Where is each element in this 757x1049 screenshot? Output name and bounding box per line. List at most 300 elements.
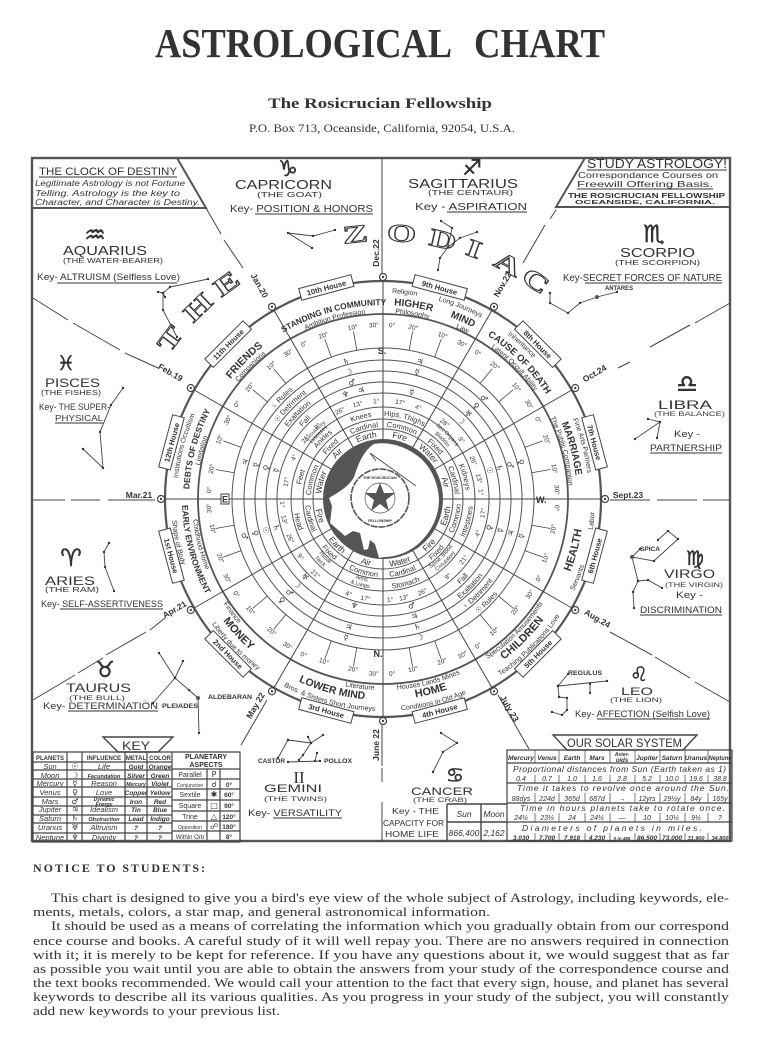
planetary aspects: ✱ <box>211 790 218 799</box>
planet symbols: ♀ <box>471 401 481 411</box>
sign: Pisces: PHYSICAL <box>55 413 103 423</box>
body parts ring: Circulatory <box>303 419 328 443</box>
row: orbital periods: 365d <box>564 796 581 803</box>
row: proportional distances <box>513 764 727 783</box>
sun marks on spokes <box>158 274 608 724</box>
planetary aspects: Opposition <box>178 825 202 831</box>
row: rotation: Time in hours planets take to rotate once. <box>520 803 725 813</box>
key planet rows: Iron <box>130 799 142 806</box>
house keywords: 4th house: HOME <box>414 682 447 698</box>
word: THE ZODIAC: O <box>386 219 417 248</box>
key planet rows: ♄ <box>71 814 79 823</box>
planetary aspects: ☌ <box>211 780 217 789</box>
word: THE ZODIAC: D <box>427 223 459 256</box>
panel: the clock of destiny <box>32 158 206 208</box>
planetary dignities labels: ☉ Detriment <box>271 386 310 425</box>
house keywords: 3rd house: Bros. & Sisters Short Journeys <box>284 682 375 712</box>
row: orbital periods: 29½y <box>662 795 681 803</box>
key planet rows: Venus <box>40 788 61 797</box>
word: THE ZODIAC: T <box>152 321 189 357</box>
sign: Scorpio: SCORPIO <box>620 245 695 260</box>
element ring: Air <box>439 476 452 489</box>
house keywords: 6th house: HEALTH <box>564 529 582 572</box>
sign: Taurus: ALDEBARAN <box>208 695 252 701</box>
degree tick labels: 20° <box>215 552 226 565</box>
planetary aspects: 8° <box>226 833 233 841</box>
degree tick labels: 10° <box>318 656 330 667</box>
row: diameters: Diameters of planets in miles. <box>522 823 702 833</box>
key planet rows: ? <box>134 835 138 842</box>
ingress dates: July 23 <box>498 694 521 724</box>
planet symbols: ♄ <box>341 356 351 367</box>
house keywords: 1st house: EARLY ENVIRONMENT <box>182 505 211 592</box>
key planet rows: ♅ <box>71 823 79 832</box>
spoke degree labels: 30° <box>222 413 234 426</box>
sign: Cancer: CAPACITY FOR <box>383 819 444 828</box>
key header row: PLANETS <box>36 756 64 762</box>
row: rotation: 9½ <box>691 814 701 822</box>
degrees ring: 9° <box>443 571 453 581</box>
key planet rows: Yellow <box>150 790 171 797</box>
degree tick labels: 10° <box>437 330 449 341</box>
degrees ring: 4° <box>344 589 353 599</box>
planet symbols: ☿ <box>342 633 349 643</box>
solar system header: Venus <box>537 755 557 762</box>
sign: Gemini <box>248 735 352 819</box>
house keywords: 9th house: Law <box>456 324 469 333</box>
degrees ring: 17° <box>478 507 488 518</box>
key planet rows: Saturn <box>39 814 61 823</box>
planet symbols: ♆ <box>350 600 359 611</box>
sign: Capricorn: (THE GOAT) <box>257 190 323 199</box>
planet symbols: ♀ <box>250 529 260 537</box>
degree tick labels: 10° <box>407 665 419 674</box>
sign: Aries: (THE RAM) <box>45 587 99 594</box>
house labels: 10th House <box>306 278 347 298</box>
row: orbital periods <box>512 783 729 803</box>
key planet rows: Gold <box>129 764 144 771</box>
row: rotation: 10 <box>643 815 651 822</box>
sign: Pisces: (THE FISHES) <box>41 390 101 397</box>
degree tick labels: 20° <box>509 604 522 617</box>
planetary aspects <box>176 754 236 841</box>
spoke degree labels: 30° <box>523 398 535 411</box>
spoke degree labels: 30° <box>524 588 536 601</box>
house keywords: 6th house <box>564 512 594 590</box>
row: diameters: 4,230 <box>588 835 606 842</box>
key planet rows: Life <box>98 762 110 771</box>
solar system header: oids <box>616 758 629 764</box>
house keywords: 6th house: Servants <box>570 565 584 590</box>
notice text: ments, metals, colors, a star map, and general astronomical information. <box>33 905 490 919</box>
degrees ring: 28° <box>438 417 451 429</box>
sign: Cancer: HOME LIFE <box>385 830 439 839</box>
sign: Capricorn: Key- POSITION & HONORS <box>230 204 373 215</box>
sign: Taurus: ::· <box>143 699 149 706</box>
spoke degree labels: 0° <box>533 415 543 425</box>
key planet rows: Dynamic <box>94 797 115 803</box>
sign: Gemini: (THE TWINS) <box>264 796 327 803</box>
icon: seal star <box>365 483 395 511</box>
centre: dark disc with white figure: FELLOWSHIP <box>368 519 392 523</box>
quality ring: Cardinal <box>348 419 380 437</box>
planet symbols: ♀ <box>485 523 495 532</box>
degrees ring: 21° <box>309 568 322 581</box>
degree tick labels: 20° <box>541 433 552 446</box>
notice text: add new keywords to your previous list. <box>33 1004 280 1018</box>
sign: Taurus: ♉ <box>95 658 115 683</box>
spoke degree labels: 30° <box>369 321 379 329</box>
spoke degree labels: 0° <box>232 399 242 409</box>
study address: THE ROSICRUCIAN FELLOWSHIP <box>568 191 725 200</box>
degree tick labels: 10° <box>510 381 523 394</box>
notice text: keywords to describe all its various qualities. As you progress in your study of the subject, you will constantly <box>33 990 730 1004</box>
planet symbols: ☿ <box>413 367 421 377</box>
planet symbols: ♄ <box>271 523 282 532</box>
spoke degree labels: 0° <box>389 321 396 329</box>
house labels <box>159 275 607 723</box>
row: orbital periods: 687d <box>589 796 606 803</box>
element ring: Fire <box>420 536 438 554</box>
degrees ring: 26° <box>468 455 479 467</box>
house keywords: 12th house: DEBTS OF DESTINY <box>183 408 210 489</box>
planet symbols: ☽ <box>344 367 354 377</box>
planet symbols <box>239 354 527 643</box>
ingress dates: Aug.24 <box>583 607 613 630</box>
spoke degree labels: 30° <box>456 649 469 661</box>
degrees ring: 13° <box>474 473 484 485</box>
planetary aspects: Sextile <box>179 792 201 799</box>
key planet rows: Moon <box>41 771 59 780</box>
row: proportional distances: Proportional distances from Sun (Earth taken as 1) <box>513 764 726 774</box>
spoke degree labels: 0° <box>553 505 561 512</box>
house keywords: 2nd house: Liberty due to money <box>212 622 260 670</box>
key planet rows: ♀ <box>72 788 78 797</box>
spoke degree labels: 30° <box>281 640 294 652</box>
sign: Aquarius: (THE WATER-BEARER) <box>63 258 163 265</box>
quality ring <box>306 422 461 577</box>
compass letters: E <box>222 494 228 504</box>
planetary aspects: ☍ <box>210 822 218 831</box>
planetary aspects: Conjunction <box>177 783 203 789</box>
planet symbols: ♃ <box>357 385 366 396</box>
house keywords: 1st house: Shape of Body <box>172 520 186 564</box>
degree tick labels: 10° <box>540 552 551 564</box>
sign: Libra: Key - <box>674 429 700 439</box>
sign: Taurus: Key- DETERMINATION <box>43 701 158 712</box>
planet symbols: ♅ <box>299 571 311 583</box>
clock heading: THE CLOCK OF DESTINY <box>39 166 178 178</box>
word: THE ZODIAC: E <box>208 265 245 302</box>
sign: Cancer: ♋ <box>446 763 464 787</box>
key planet rows: Mercury <box>126 782 146 788</box>
row: proportional distances: 5.2 <box>642 776 652 783</box>
luminaries table: Sun <box>456 809 472 819</box>
solar system header: Neptune <box>708 755 732 762</box>
planetary aspects: 0° <box>226 781 233 789</box>
spoke degree labels: 0° <box>299 339 309 349</box>
solar system header: Saturn <box>662 755 682 762</box>
key planet rows: Green <box>151 773 169 780</box>
body parts ring <box>294 410 472 588</box>
sign: Virgo: DISCRIMINATION <box>640 605 722 616</box>
house keywords: 3rd house: Literature <box>346 682 374 690</box>
row: orbital periods: 165y <box>712 796 728 803</box>
element ring: Fire <box>392 432 407 441</box>
sign: Capricorn: ♑ <box>278 157 298 182</box>
solar system header: Earth <box>564 755 580 762</box>
title: CHART <box>474 20 605 66</box>
key planet rows: Energy <box>96 802 113 808</box>
house labels: 1st House <box>162 537 180 574</box>
word: THE ZODIAC: C <box>517 262 555 300</box>
solar system header: Aster- <box>614 752 630 758</box>
degree tick labels: 10° <box>214 433 225 445</box>
quality ring: Fixed <box>320 542 340 562</box>
sign: Scorpio: (THE SCORPION) <box>615 258 701 267</box>
planet symbols: ♃ <box>344 622 353 632</box>
row: proportional distances: 0.4 <box>516 776 526 783</box>
degrees ring: 9° <box>312 421 323 431</box>
degrees ring: 1° <box>278 501 286 508</box>
house labels: 3rd House <box>307 702 345 720</box>
house keywords: 8th house: Inheritance <box>508 332 536 358</box>
word: THE ZODIAC: H <box>178 287 218 327</box>
key planet rows: Idealism <box>90 805 118 814</box>
sector spokes <box>165 281 601 717</box>
planet symbols: ♂ <box>347 377 356 388</box>
planet symbols: ♂ <box>478 393 489 404</box>
study text: Freewill Offering Basis. <box>577 180 713 189</box>
sign: Cancer: Key - THE <box>392 806 439 816</box>
house keywords: 9th house <box>392 288 482 333</box>
key planet rows: Indigo <box>150 816 170 823</box>
degrees ring: 1° <box>373 397 380 405</box>
house keywords: 2nd house: MONEY <box>224 616 256 648</box>
house keywords: 8th house: CAUSE OF DEATH <box>489 332 552 394</box>
row: rotation: 24 <box>567 815 576 822</box>
planet symbols: ☿ <box>517 533 527 540</box>
degree tick labels: 10° <box>347 323 359 332</box>
degrees ring: 17° <box>394 398 406 407</box>
row: orbital periods: 88dys <box>512 796 531 803</box>
planet symbols: ♄ <box>494 463 505 472</box>
sign: Libra: PARTNERSHIP <box>650 443 722 454</box>
spoke degree labels: 0° <box>231 590 241 599</box>
body parts ring: Spine, Blood <box>427 543 455 571</box>
house keywords: 4th house <box>397 670 466 710</box>
ingress dates: May 22 <box>244 690 267 720</box>
sign: Leo: LEO <box>621 686 654 698</box>
ring circles <box>165 281 601 717</box>
element ring: Water <box>420 443 438 462</box>
degrees ring: 26° <box>416 586 429 598</box>
sign: Gemini: II <box>293 768 305 787</box>
sign: Leo: (THE LION) <box>610 698 662 704</box>
spoke degree labels: 0° <box>299 650 308 660</box>
planet symbols: ♀ <box>262 464 272 472</box>
planetary dignities labels: Exaltation <box>455 571 485 601</box>
spoke degree labels: 0° <box>205 486 213 493</box>
planetary aspects: 120° <box>222 813 236 821</box>
sign: Pisces: PISCES <box>45 376 100 390</box>
sign: Leo: Key- AFFECTION (Selfish Love) <box>575 709 710 720</box>
row: diameters: 34,800 <box>712 836 728 842</box>
solar system banner: OUR SOLAR SYSTEM <box>567 736 682 750</box>
sign: Scorpio <box>550 220 722 313</box>
sign: Libra: (THE BALANCE) <box>654 411 725 418</box>
title: ASTROLOGICAL <box>155 20 452 66</box>
sign: Capricorn <box>230 157 373 248</box>
sign: Aries: ♈ <box>60 544 82 572</box>
house keywords: 7th house: Fine Arts Partners <box>573 418 591 473</box>
notice text: ence course and books. A careful study of it will well repay you. There are no answers required in connection <box>33 934 730 948</box>
ingress dates: Dec.22 <box>371 239 381 267</box>
panel: study astrology <box>556 156 730 207</box>
key planet rows: Love <box>96 788 112 797</box>
body parts ring: Intestines <box>458 504 476 539</box>
key planet rows: Uranus <box>38 823 62 832</box>
house keywords: 9th house: Religion <box>392 288 417 296</box>
word: THE ZODIAC: Z <box>341 219 369 249</box>
degree tick labels: 10° <box>488 625 501 638</box>
body parts ring: Sex Organs <box>434 422 460 448</box>
body parts ring: Neck <box>314 555 327 569</box>
sign: Sagittarius: (THE CENTAUR) <box>428 190 513 197</box>
body parts ring: Throat <box>317 550 333 566</box>
degree tick labels: 20° <box>243 381 256 393</box>
body parts ring: & Lungs <box>349 579 371 591</box>
house keywords: 3rd house: LOWER MIND <box>299 675 365 699</box>
row: rotation: 23½ <box>539 814 554 822</box>
key planet rows: Lead <box>128 816 145 823</box>
sign: Gemini: Key- VERSATILITY <box>248 808 343 819</box>
planet symbols: ☿ <box>251 461 261 469</box>
degree tick labels <box>207 323 559 674</box>
body parts ring: Head <box>292 512 306 531</box>
row: diameters: 73,000 <box>662 835 682 842</box>
notice text: It should be used as a means of correlating the information which you gradually obtain from our correspond <box>51 919 730 933</box>
quality ring: Common <box>446 502 464 535</box>
wheel <box>156 272 610 726</box>
solar system header: Mars <box>589 755 605 762</box>
sign: Leo: ♌ <box>630 662 648 686</box>
spoke degree labels: 0° <box>474 641 483 651</box>
row: orbital periods: → <box>618 796 626 803</box>
clock text: Telling. Astrology is the key to <box>35 189 181 198</box>
house keywords: 9th house: Philosophy <box>396 308 430 320</box>
planet symbols: ☉ <box>260 526 271 535</box>
row: rotation: 10½ <box>665 814 679 822</box>
sign: Leo <box>552 662 710 720</box>
degrees ring: 21° <box>300 432 312 445</box>
row: proportional distances: 10.0 <box>665 776 679 783</box>
planetary aspects: 90° <box>224 802 234 810</box>
clock text: Character, and Character is Destiny. <box>35 198 200 207</box>
planet symbols: ☿ <box>271 467 281 474</box>
sign: Capricorn: CAPRICORN <box>235 178 332 192</box>
sign: Aries: Key- SELF-ASSERTIVENESS <box>41 599 163 609</box>
sign: Libra: LIBRA <box>658 398 712 412</box>
sign: Aquarius: AQUARIUS <box>63 244 147 258</box>
key planet rows: ? <box>158 835 162 842</box>
body parts ring: Stomach <box>390 574 421 592</box>
body parts ring: Bladder <box>433 431 452 449</box>
word: THE ZODIAC: I <box>463 233 486 264</box>
key planet rows: Orange <box>149 764 172 771</box>
planetary dignities labels: Fall <box>297 413 313 429</box>
planetary aspects: Trine <box>182 814 198 821</box>
planetary aspects: □ <box>210 801 218 810</box>
degrees ring: 1° <box>387 596 394 604</box>
quality ring: Common <box>302 463 321 497</box>
row: orbital periods: Time it takes to revolve once around the Sun. <box>517 783 729 793</box>
degree tick labels: 10° <box>550 463 559 475</box>
house keywords: 5th house: Teaching Publications Love <box>498 614 560 675</box>
element ring: Air <box>330 445 345 461</box>
degree tick lines <box>216 332 550 666</box>
quality ring: Fixed <box>426 542 446 562</box>
degrees ring: 13° <box>352 399 364 409</box>
clock text: Legitimate Astrology is not Fortune <box>35 179 186 188</box>
planet symbols: ♃ <box>240 457 251 467</box>
sign: Sagittarius <box>408 156 527 270</box>
sign: Libra: ♎ <box>676 370 698 398</box>
house keywords: 4th house: Houses Lands Mines <box>397 670 460 690</box>
element ring: Water <box>387 553 412 570</box>
planet symbols: ☿ <box>408 387 415 397</box>
ingress dates: June 22 <box>371 729 381 761</box>
key banner: KEY <box>122 739 150 753</box>
key table <box>33 737 240 842</box>
ingress dates: Nov.22 <box>491 270 514 299</box>
house labels: 8th House <box>521 328 554 361</box>
sign: Aquarius: ♒ <box>84 221 106 249</box>
planetary aspects: P <box>212 770 217 779</box>
planet symbols: ♀ <box>516 458 526 466</box>
notice text: as possible you wait until you are able to obtain the answers from your study of the correspondence course and <box>33 962 730 976</box>
planet symbols: ♅ <box>462 408 474 420</box>
sign: Libra <box>635 370 725 454</box>
sign: Pisces: Key- THE SUPER- <box>39 402 110 412</box>
house keywords: 9th house: MIND <box>450 310 475 326</box>
house keywords: 9th house: Long Journeys <box>438 296 482 318</box>
house labels: 6th House <box>586 537 604 574</box>
spoke degree labels: 30° <box>456 338 469 350</box>
element ring: Earth <box>356 432 376 442</box>
luminaries table <box>447 804 507 841</box>
row: rotation <box>513 803 725 822</box>
key planet rows: Blue <box>153 807 167 814</box>
planet symbols: ♂ <box>407 600 416 611</box>
planetary dignities labels: ☉ Rules <box>473 589 500 616</box>
key planet rows: ♂ <box>71 797 79 806</box>
planetary aspects: ASPECTS <box>189 762 223 769</box>
degrees ring: 13° <box>279 514 289 526</box>
spoke degree labels: 30° <box>205 503 213 513</box>
house keywords: 11th house: FRIENDS <box>226 342 262 379</box>
degree tick labels: 20° <box>436 656 449 667</box>
planet symbols: ♀ <box>276 595 287 606</box>
row: rotation: — <box>618 815 626 822</box>
notice text: the text books recommended. We would call your attention to the fact that every sign, house, and planet has several <box>33 976 730 990</box>
house labels: 9th House <box>421 279 458 297</box>
degrees ring: 9° <box>456 435 467 445</box>
quality ring: Cardinal <box>302 503 319 534</box>
degree tick labels: 10° <box>265 359 278 372</box>
compass letters <box>221 346 546 659</box>
spoke degree labels: 0° <box>389 670 396 678</box>
